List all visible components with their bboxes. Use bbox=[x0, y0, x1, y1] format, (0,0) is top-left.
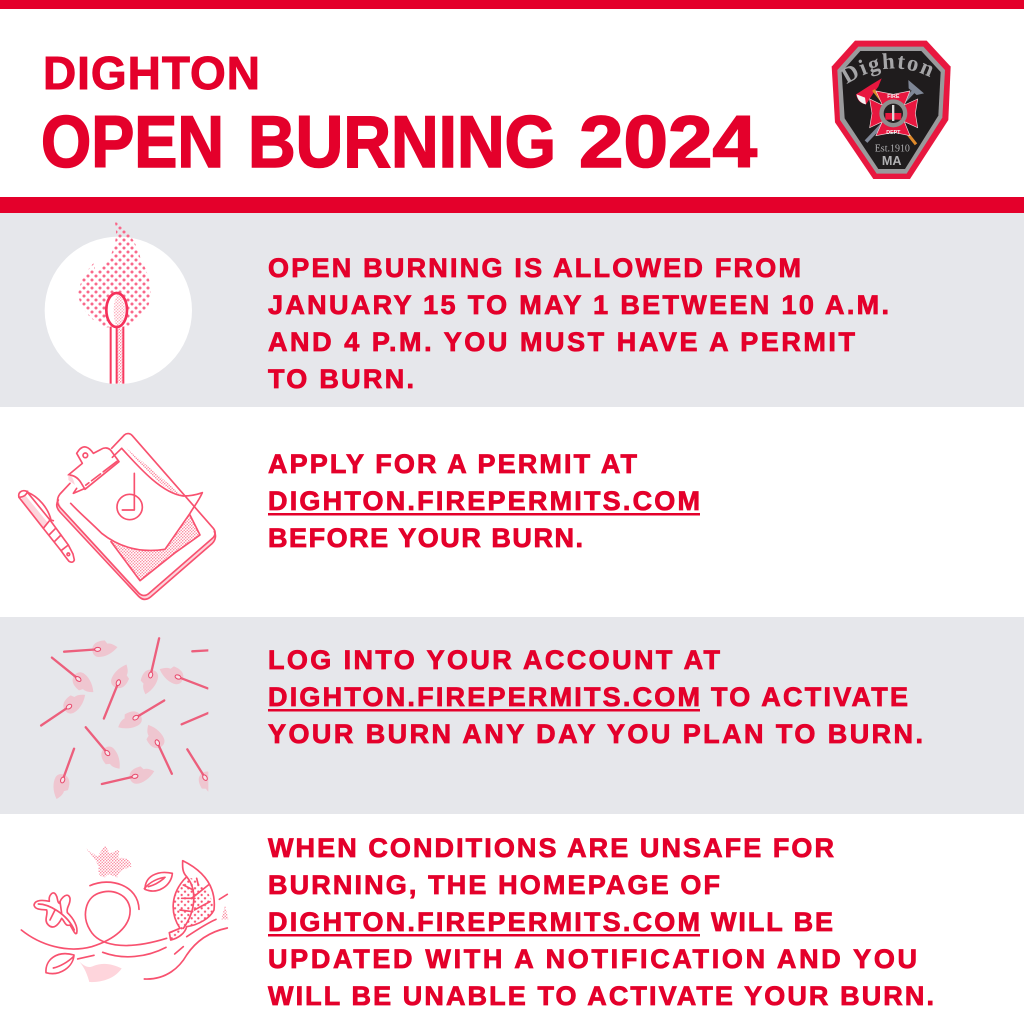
top red bar bbox=[0, 0, 1024, 9]
text: unsafe conditions: WILL BE bbox=[711, 907, 833, 937]
icon: scattered matches bbox=[36, 636, 222, 802]
panel: apply for permit bbox=[0, 407, 1024, 617]
panel: unsafe conditions bbox=[20, 838, 933, 1006]
title: Open Burning 2024: OPEN bbox=[41, 102, 224, 183]
text: dates and hours: AND 4 P.M. YOU MUST HAVE A PERMIT bbox=[268, 327, 856, 357]
icon: burning match bbox=[45, 219, 192, 384]
title: Dighton: DIGHTON bbox=[43, 47, 260, 99]
text: dates and hours: OPEN BURNING IS ALLOWED FROM bbox=[268, 253, 801, 283]
small leaf bottom bbox=[46, 954, 74, 974]
large dotted leaf bbox=[169, 877, 214, 940]
title: Open Burning 2024 bbox=[41, 102, 757, 183]
title: Open Burning 2024: 2024 bbox=[579, 102, 757, 183]
badge est: Est.1910 bbox=[875, 144, 910, 155]
oak leaf bbox=[34, 893, 77, 934]
text: apply for permit: BEFORE YOUR BURN. bbox=[268, 523, 583, 553]
text: unsafe conditions: UPDATED WITH A NOTIFICATION AND YOU bbox=[268, 944, 917, 974]
text: activate burn bbox=[268, 645, 923, 749]
badge name: Dighton bbox=[840, 53, 932, 84]
header bbox=[41, 47, 757, 183]
text: apply for permit: DIGHTON.FIREPERMITS.COM bbox=[268, 486, 700, 516]
text: unsafe conditions: WILL BE UNABLE TO ACTIVATE YOUR BURN. bbox=[268, 981, 934, 1011]
text: dates and hours: TO BURN. bbox=[268, 364, 414, 394]
badge tool bbox=[866, 80, 924, 142]
icon: leaves in the wind bbox=[21, 845, 228, 982]
text: apply for permit: APPLY FOR A PERMIT AT bbox=[268, 449, 638, 479]
text: dates and hours: JANUARY 15 TO MAY 1 BETWEEN 10 A.M. bbox=[268, 290, 889, 320]
text: apply for permit bbox=[268, 449, 700, 553]
header red divider bbox=[0, 197, 1024, 213]
pen bbox=[19, 491, 74, 562]
fire department badge bbox=[831, 40, 951, 179]
badge maltese cross bbox=[870, 91, 918, 136]
text: unsafe conditions: WHEN CONDITIONS ARE UNSAFE FOR bbox=[268, 833, 834, 863]
panel: open burning dates bbox=[0, 213, 1024, 407]
badge axe bbox=[856, 78, 916, 144]
text: unsafe conditions bbox=[268, 833, 934, 1011]
text: activate burn: YOUR BURN ANY DAY YOU PLAN TO BURN. bbox=[268, 719, 923, 749]
text: activate burn: DIGHTON.FIREPERMITS.COM bbox=[268, 682, 700, 712]
text: activate burn: LOG INTO YOUR ACCOUNT AT bbox=[268, 645, 720, 675]
badge fire dept text: FIRE bbox=[887, 94, 900, 100]
text: unsafe conditions: DIGHTON.FIREPERMITS.COM bbox=[268, 907, 700, 937]
badge maltese cross: DEPT bbox=[886, 130, 901, 136]
panel: activate burn bbox=[0, 617, 1024, 814]
text: activate burn: TO ACTIVATE bbox=[711, 682, 908, 712]
badge state: MA bbox=[882, 154, 902, 168]
icon: clipboard and pen bbox=[19, 434, 215, 599]
text: unsafe conditions: BURNING, THE HOMEPAGE OF bbox=[268, 870, 720, 900]
title: Open Burning 2024: BURNING bbox=[248, 102, 556, 183]
text: dates and hours bbox=[268, 253, 889, 394]
small leaf top bbox=[145, 872, 172, 891]
